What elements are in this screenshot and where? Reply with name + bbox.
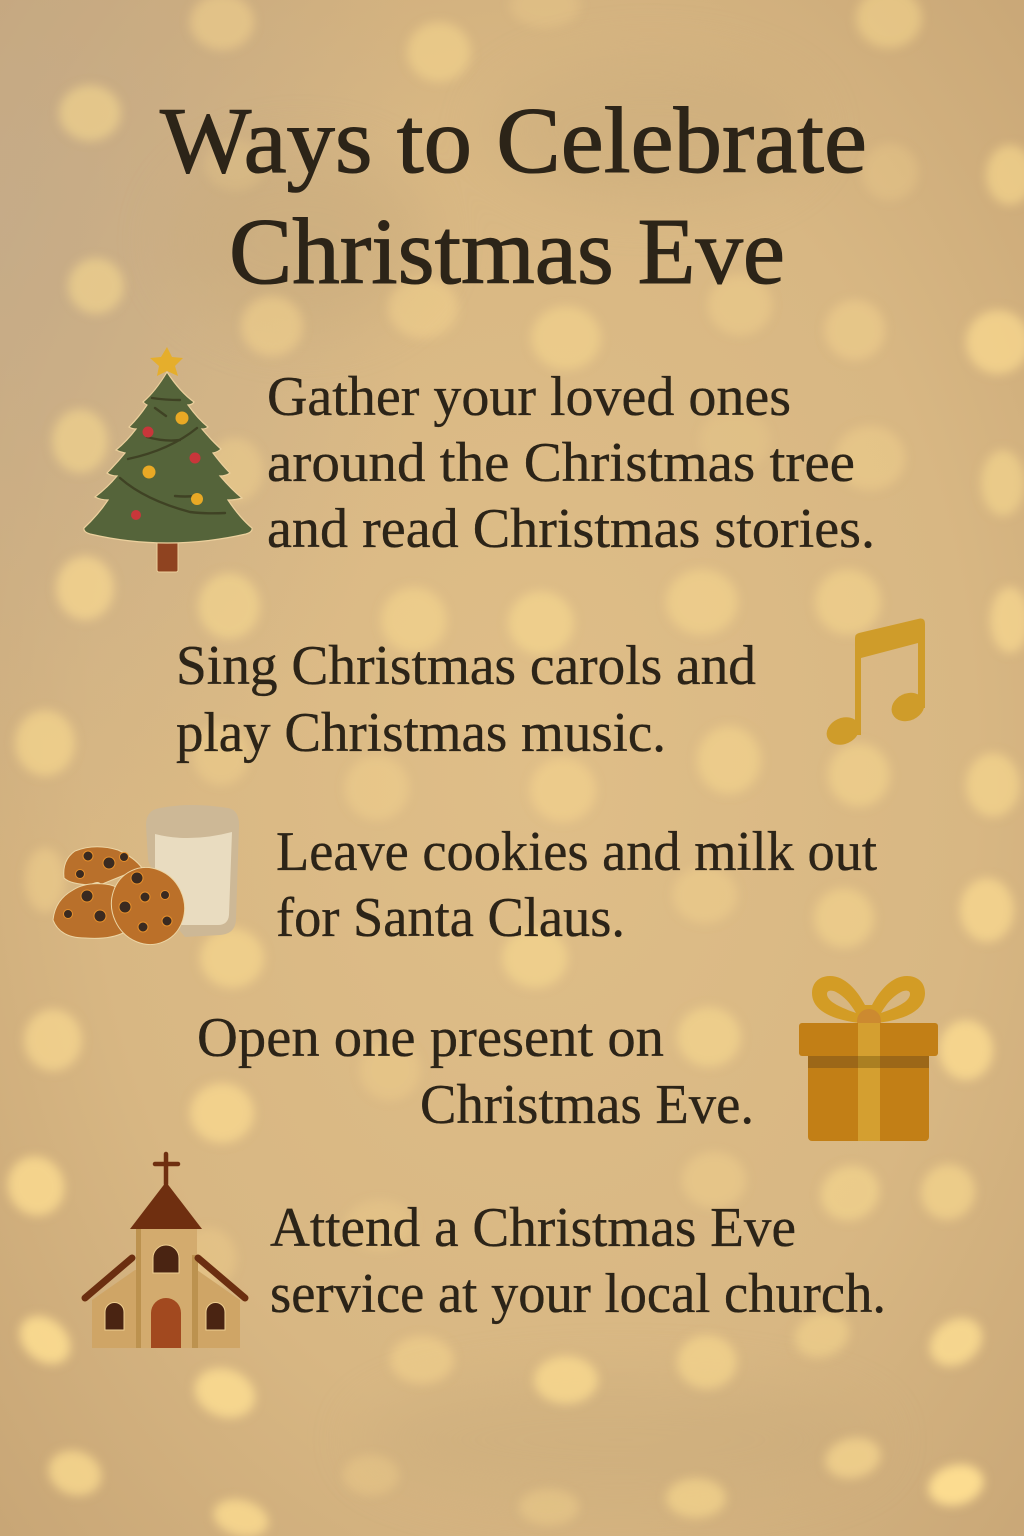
icon: church	[85, 1154, 245, 1348]
text: sing	[176, 635, 756, 764]
text: attend: service at your local church.	[270, 1263, 886, 1325]
text: open: Christmas Eve.	[420, 1074, 754, 1136]
text: gather: around the Christmas tree	[267, 432, 855, 494]
text: open	[197, 1007, 754, 1136]
title	[160, 89, 867, 304]
text: leave: Leave cookies and milk out	[276, 821, 877, 883]
text: leave	[276, 821, 877, 949]
text: open: Open one present on	[197, 1007, 664, 1069]
title: Ways to Celebrate	[160, 89, 867, 193]
text: attend	[270, 1197, 886, 1325]
title: Christmas Eve	[229, 200, 785, 304]
text: gather	[267, 366, 875, 560]
icon: music note	[822, 619, 929, 750]
text: gather: Gather your loved ones	[267, 366, 791, 428]
text: sing: Sing Christmas carols and	[176, 635, 756, 697]
text: gather: and read Christmas stories.	[267, 498, 875, 560]
icon: gift box	[799, 976, 938, 1141]
icon: cookies and milk	[53, 805, 239, 957]
icon: christmas tree	[84, 347, 252, 572]
text: attend: Attend a Christmas Eve	[270, 1197, 796, 1259]
text: leave: for Santa Claus.	[276, 887, 625, 949]
text: sing: play Christmas music.	[176, 702, 666, 764]
